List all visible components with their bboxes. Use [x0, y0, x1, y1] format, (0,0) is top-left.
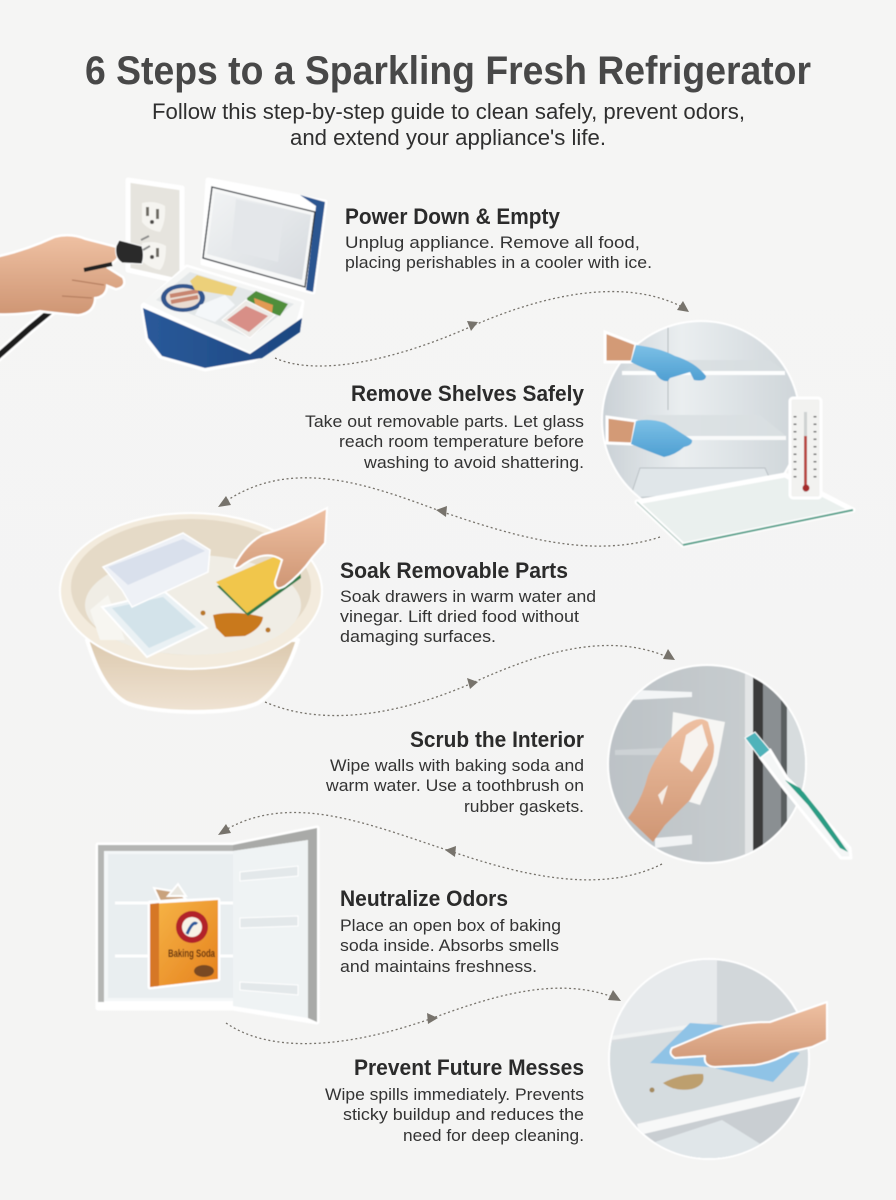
- icon: baking soda box: [150, 884, 218, 987]
- connector: step 4 to step 5: [218, 812, 662, 880]
- title: 6 Steps to a Sparkling Fresh Refrigerator: [85, 49, 811, 93]
- illustration: step 3 soaking bowl: [60, 508, 327, 712]
- step 3 text: damaging surfaces.: [340, 628, 496, 646]
- icon: hand holding plug: [0, 236, 150, 314]
- panel: interior wall circle: [605, 660, 812, 870]
- step 4 text: rubber gaskets.: [464, 798, 584, 816]
- illustration: step 2 shelves: [600, 320, 853, 545]
- icon: open fridge: [98, 828, 317, 1022]
- subtitle: and extend your appliance's life.: [290, 125, 606, 150]
- step 4 text: warm water. Use a toothbrush on: [325, 777, 584, 795]
- icon: gloved hands: [605, 332, 706, 457]
- icon: toothbrush: [745, 732, 851, 858]
- step 2 text: Take out removable parts. Let glass: [305, 413, 584, 431]
- step 4 text: Scrub the Interior: [410, 727, 584, 752]
- icon: cord: [0, 305, 58, 358]
- icon: sponge and hand: [216, 508, 327, 616]
- step 2 text: [305, 381, 585, 472]
- icon: thermometer: [790, 398, 821, 498]
- step 6 text: need for deep cleaning.: [403, 1127, 584, 1145]
- step 5 text: [340, 886, 561, 976]
- icon: blue cloth: [650, 1023, 800, 1082]
- step 5 text: Neutralize Odors: [340, 886, 508, 911]
- step 4 text: [325, 727, 584, 816]
- panel: shelf circle: [605, 955, 815, 1165]
- step 5 text: Place an open box of baking: [340, 917, 561, 935]
- step 5 text: and maintains freshness.: [340, 958, 537, 976]
- illustration: step 1 unplug and cooler: [0, 180, 325, 369]
- icon: drawers in water: [90, 533, 210, 657]
- step 3 text: Soak Removable Parts: [340, 558, 568, 583]
- step 1 text: [345, 204, 652, 272]
- step 6 text: Prevent Future Messes: [354, 1055, 584, 1080]
- icon: cooler: [143, 180, 325, 369]
- step 3 text: [340, 558, 596, 646]
- step 3 text: Soak drawers in warm water and: [340, 588, 596, 606]
- icon: wall outlet: [128, 180, 182, 282]
- subtitle: [152, 99, 745, 150]
- icon: stain: [200, 610, 270, 637]
- icon: cloth and hand: [628, 712, 725, 842]
- illustration: step 6 wiping spill: [605, 955, 827, 1165]
- step 2 text: reach room temperature before: [339, 433, 584, 451]
- step 2 text: Remove Shelves Safely: [351, 381, 585, 406]
- icon: hand wiping: [671, 1002, 827, 1067]
- connector: step 2 to step 3: [218, 478, 660, 546]
- icon: spill: [650, 1074, 704, 1092]
- step 4 text: Wipe walls with baking soda and: [330, 757, 584, 775]
- icon: bowl: [60, 513, 322, 712]
- step 6 text: [325, 1055, 584, 1145]
- step 6 text: Wipe spills immediately. Prevents: [325, 1086, 584, 1104]
- step 1 text: Power Down & Empty: [345, 204, 561, 229]
- illustration: step 4 scrub interior: [605, 660, 851, 870]
- step 1 text: Unplug appliance. Remove all food,: [345, 234, 640, 252]
- panel: fridge interior circle: [602, 320, 798, 498]
- connector: step 1 to step 2: [275, 292, 689, 366]
- icon: baking soda box: Baking Soda: [168, 948, 216, 960]
- connector: step 5 to step 6: [226, 988, 621, 1044]
- step 5 text: soda inside. Absorbs smells: [340, 937, 559, 955]
- subtitle: Follow this step-by-step guide to clean safely, prevent odors,: [152, 99, 745, 124]
- icon: glass shelf: [637, 475, 853, 545]
- step 3 text: vinegar. Lift dried food without: [340, 608, 579, 626]
- step 2 text: washing to avoid shattering.: [363, 454, 584, 472]
- illustration: step 5 open fridge with baking soda: [98, 828, 317, 1022]
- step 1 text: placing perishables in a cooler with ice.: [345, 254, 652, 272]
- step 6 text: sticky buildup and reduces the: [343, 1106, 584, 1124]
- connector: step 3 to step 4: [265, 645, 675, 716]
